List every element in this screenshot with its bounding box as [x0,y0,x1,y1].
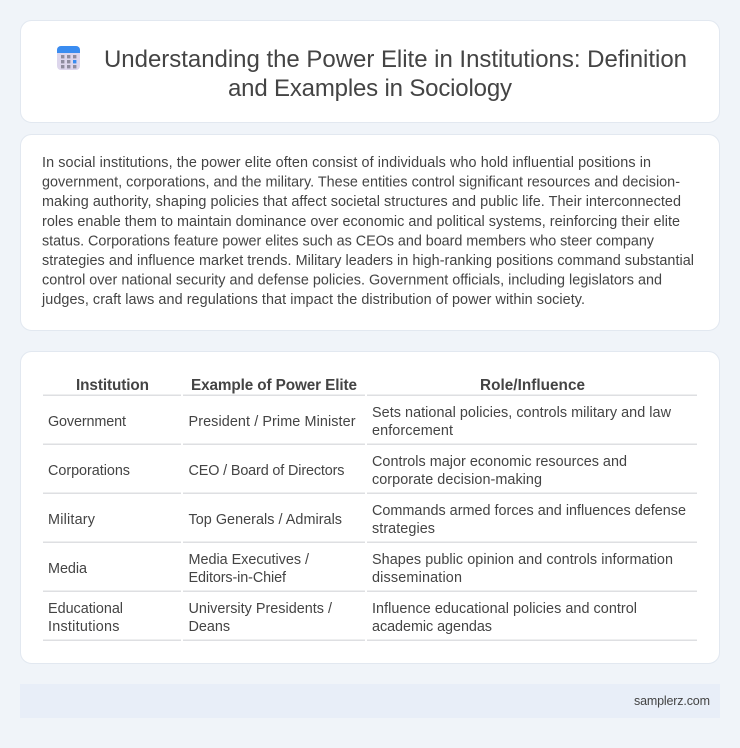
table row: Educational Institutions: Institutions [48,619,120,635]
title [104,46,687,102]
text block: paragraph: control over national security and defense policies. Government officials, including legislators and [42,273,662,289]
text block: paragraph: government, corporations, and the military. These entities control significant resources and decision- [42,175,680,191]
table row: Media [48,552,673,586]
table row: Media: Editors-in-Chief [188,570,287,586]
text block: paragraph: making authority, shaping policies that affect societal structures and public life. Their interconnected [42,194,681,210]
text block: paragraph: strategies and influence market trends. Military leaders in high-ranking positions command substantial [42,253,694,269]
table header row: Role/Influence [480,377,585,394]
text block: paragraph: roles enable them to maintain dominance over economic and political systems, reinforcing their elite [42,214,680,230]
table row: Government: enforcement [372,423,453,439]
text block: paragraph: judges, craft laws and regulations that impact the distribution of power within society. [41,292,585,308]
table row: Educational Institutions: academic agendas [372,619,492,635]
table row: Media: Shapes public opinion and controls information [372,552,673,568]
table row: Media: Media [48,561,87,577]
text block: paragraph: In social institutions, the power elite often consist of individuals who hold influential positions in [42,155,651,171]
table row: Corporations: CEO / Board of Directors [188,463,344,479]
table header row [76,377,585,394]
table row: Government: President / Prime Minister [188,414,356,430]
panel: header [20,20,720,122]
icon: calendar [57,46,80,70]
table header row: Example of Power Elite [191,377,357,394]
panel: introduction text [20,134,720,330]
table row: Corporations: Controls major economic resources and [372,454,627,470]
table row: Educational Institutions: Deans [188,619,230,635]
table row: Military: Military [48,512,96,528]
table row: Media: Media Executives / [188,552,309,568]
table row: Government: Government [48,414,126,430]
table row: Corporations: corporate decision-making [372,472,542,488]
table row: Educational Institutions: University Presidents / [188,601,332,617]
text block: paragraph: status. Corporations feature power elites such as CEOs and board members who steer company [42,233,655,249]
table row: Military: Top Generals / Admirals [188,512,342,528]
table row: Educational Institutions: Educational [48,601,123,617]
table row: Government [48,405,672,439]
table row: Media: dissemination [372,570,462,586]
table row: Military: Commands armed forces and influences defense [372,503,686,519]
title: Understanding the Power Elite in Institutions: Definition [104,46,687,73]
footer [20,684,720,718]
table row: Corporations [48,454,627,488]
title: and Examples in Sociology [228,75,512,102]
table row: Educational Institutions [48,601,637,635]
table row: Corporations: Corporations [48,463,130,479]
footer source text: samplerz.com [634,694,710,708]
table row: Military [48,503,686,537]
table row: Military: strategies [372,521,435,537]
panel: institutions table [20,352,720,664]
table row: Educational Institutions: Influence educational policies and control [372,601,637,617]
text block: paragraph [41,155,694,308]
table header row: Institution [76,377,149,394]
table row: Government: Sets national policies, controls military and law [372,405,672,421]
